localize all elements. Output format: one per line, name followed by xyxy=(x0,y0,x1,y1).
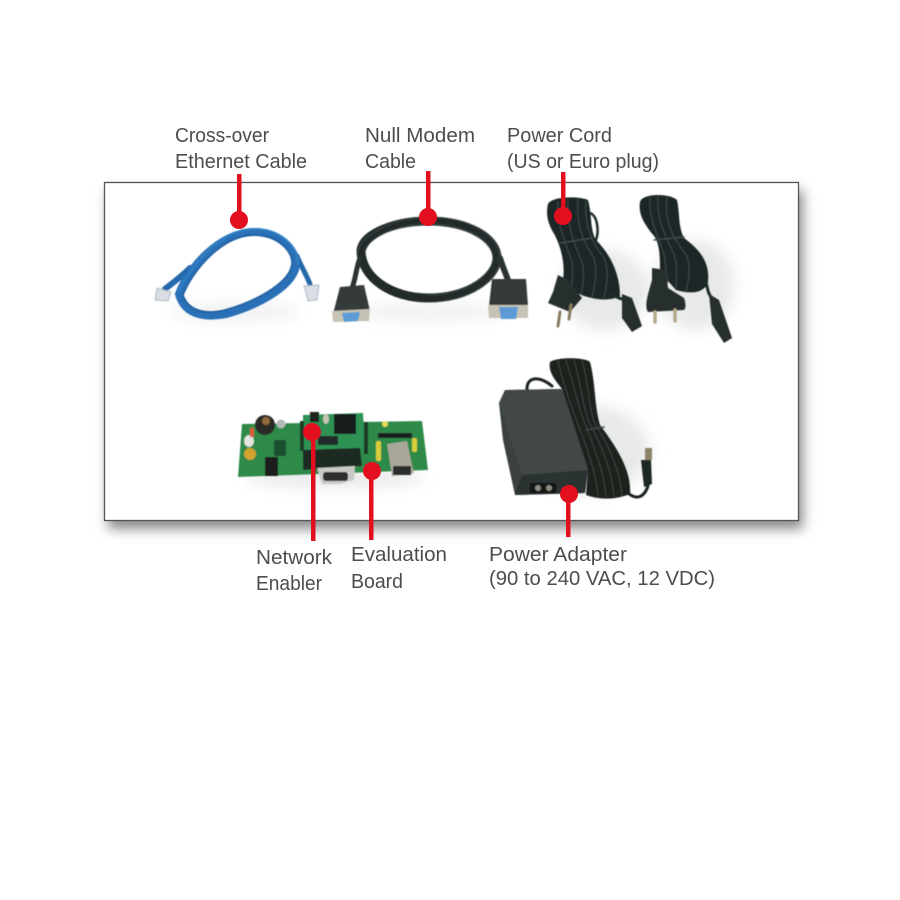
chip xyxy=(334,414,356,434)
RJ45 plug left xyxy=(155,288,171,301)
Euro cord coil xyxy=(640,195,708,292)
photo: evaluation board xyxy=(238,412,428,484)
dark block under daughterboard xyxy=(303,448,362,470)
US plug xyxy=(548,275,582,312)
callout: Evaluation Board xyxy=(351,462,447,593)
callout: Power Adapter: Power Adapter xyxy=(489,544,627,566)
AC socket xyxy=(530,483,556,493)
photo: blue cross-over ethernet cable xyxy=(155,229,319,316)
US cord coil xyxy=(547,197,620,299)
inductor xyxy=(255,415,275,435)
callout: Network Enabler xyxy=(256,423,333,595)
panel shadow xyxy=(108,190,803,529)
callout: Null Modem Cable: Null Modem xyxy=(365,125,475,147)
photo ground shadows xyxy=(170,240,735,495)
callout: Power Adapter: (90 to 240 VAC, 12 VDC) xyxy=(489,568,715,590)
photo: power adapter xyxy=(499,358,652,499)
null modem right connector xyxy=(489,279,528,306)
callout: Cross-over Ethernet Cable: Cross-over xyxy=(175,125,269,147)
callout: Network Enabler: Enabler xyxy=(256,573,322,595)
photo: black null modem cable xyxy=(332,217,528,322)
photo: US power cord xyxy=(547,197,642,332)
callout: Evaluation Board: Board xyxy=(351,571,403,593)
photo: Euro power cord xyxy=(640,195,732,343)
callout: Power Cord: Power Cord xyxy=(507,125,612,147)
adapter body xyxy=(499,389,588,495)
US cord connector xyxy=(622,294,642,332)
callout: Power Cord xyxy=(507,125,659,225)
Euro cord connector xyxy=(709,294,732,343)
null modem left connector xyxy=(333,285,370,314)
network enabler daughterboard xyxy=(303,413,365,450)
RJ45 plug right xyxy=(304,285,319,301)
pin header and LEDs xyxy=(378,433,412,438)
PCB xyxy=(238,421,428,477)
callout: Cross-over Ethernet Cable: Ethernet Cable xyxy=(175,151,307,173)
callout: Null Modem Cable xyxy=(365,125,475,226)
ethernet jack xyxy=(387,441,414,476)
callout: Cross-over Ethernet Cable xyxy=(175,125,307,229)
adapter cord coil xyxy=(550,358,630,499)
callout: Evaluation Board: Evaluation xyxy=(351,544,447,566)
photo panel xyxy=(104,182,798,520)
callout: Power Adapter xyxy=(489,485,715,590)
callout: Network Enabler: Network xyxy=(256,547,333,569)
capacitors xyxy=(276,420,286,428)
power jack xyxy=(265,457,278,476)
Euro plug xyxy=(646,268,686,312)
callout: Power Cord: (US or Euro plug) xyxy=(507,151,659,173)
callout: Null Modem Cable: Cable xyxy=(365,151,416,173)
serial connector xyxy=(317,466,355,484)
DC plug xyxy=(641,460,652,487)
